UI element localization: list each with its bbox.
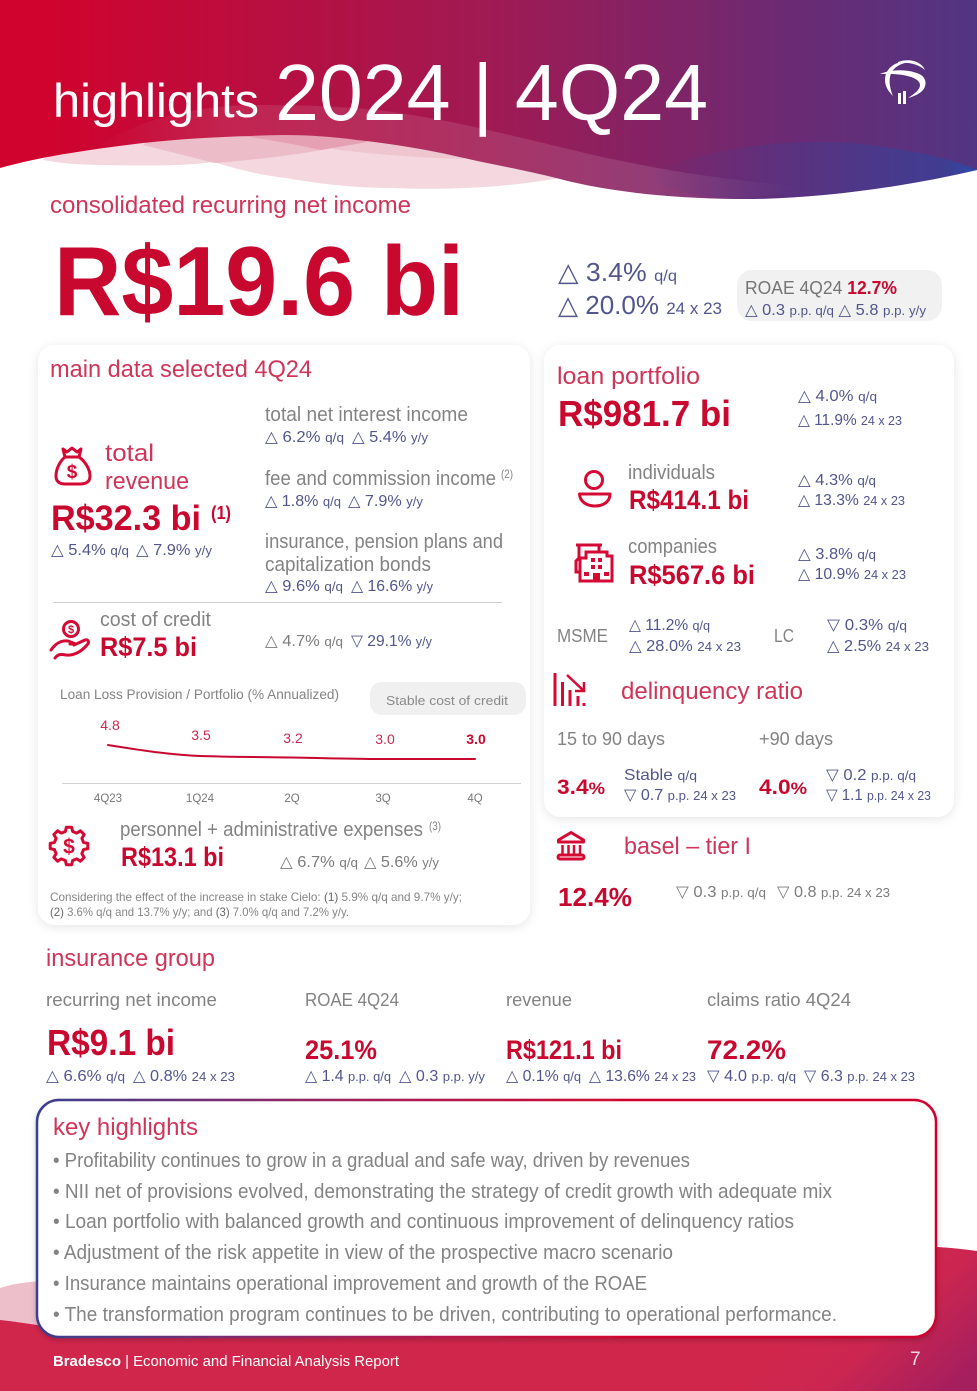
chart: loan loss provision: 1Q24 xyxy=(186,793,215,805)
callout: ROAE xyxy=(737,270,942,321)
recurring net income: △ 0.8% 24 x 23 xyxy=(133,1068,235,1085)
panel: key highlights xyxy=(37,1100,936,1337)
total revenue: R$32.3 bi xyxy=(51,499,201,538)
total revenue: △ 5.4% q/q xyxy=(51,542,129,559)
delinquency +90 days: ▽ 0.2 p.p. q/q xyxy=(826,767,916,784)
claims ratio 4Q24: claims ratio 4Q24 xyxy=(707,989,851,1010)
ROAE 4Q24: △ 0.3 p.p. y/y xyxy=(399,1068,485,1085)
bullet list: • NII net of provisions evolved, demonstrating the strategy of credit growth with adequate mix xyxy=(53,1181,832,1203)
callout: stable cost of credit: Stable cost of credit xyxy=(386,693,508,708)
bullet list: • The transformation program continues to be driven, contributing to operational performance. xyxy=(53,1304,837,1326)
section: consolidated recurring net income xyxy=(50,192,942,336)
panel: main data selected 4Q24 xyxy=(38,345,530,925)
bullet list: • Adjustment of the risk appetite in view of the prospective macro scenario xyxy=(53,1242,673,1264)
delinquency 15 to 90 days: 3.4% xyxy=(557,776,605,799)
chart: loan loss provision: 3.0 xyxy=(375,731,395,747)
revenue breakdown xyxy=(265,404,513,595)
section: insurance group xyxy=(46,945,915,1085)
delinquency +90 days xyxy=(759,729,931,804)
basel deltas: ▽ 0.3 p.p. q/q xyxy=(676,884,766,901)
delinquency +90 days: ▽ 1.1 p.p. 24 x 23 xyxy=(826,787,931,804)
personnel + administrative expenses: personnel + administrative expenses xyxy=(120,819,423,841)
personnel + administrative expenses: (3) xyxy=(429,819,441,833)
MSME xyxy=(557,617,741,655)
footnote: (2) 3.6% q/q and 13.7% y/y; and (3) 7.0% q/q and 7.2% y/y. xyxy=(50,905,349,919)
revenue breakdown: fee and commission income xyxy=(265,468,496,490)
cost of credit: R$7.5 bi xyxy=(100,632,197,662)
icon: bank xyxy=(558,832,584,859)
callout: stable cost of credit xyxy=(370,682,526,715)
basel deltas xyxy=(676,884,890,901)
delinquency 15 to 90 days: ▽ 0.7 p.p. 24 x 23 xyxy=(624,787,736,804)
basel value: 12.4% xyxy=(558,882,632,912)
big value: R$19.6 bi xyxy=(54,226,464,336)
icon: falling bars xyxy=(555,673,584,706)
chart: loan loss provision: 3.5 xyxy=(191,727,211,743)
icon: Bradesco logo xyxy=(880,60,926,104)
revenue breakdown: △ 1.8% q/q xyxy=(265,493,341,510)
personnel + administrative expenses: R$13.1 bi xyxy=(121,842,224,872)
LC xyxy=(774,617,929,655)
bullet list: • Profitability continues to grow in a gradual and safe way, driven by revenues xyxy=(53,1150,690,1172)
callout: ROAE: ROAE 4Q24 12.7% xyxy=(745,278,897,298)
ROAE 4Q24: ROAE 4Q24 xyxy=(305,989,399,1010)
loan portfolio deltas: △ 11.9% 24 x 23 xyxy=(798,412,902,429)
claims ratio 4Q24: ▽ 4.0 p.p. q/q xyxy=(707,1068,796,1085)
revenue breakdown: capitalization bonds xyxy=(265,554,431,576)
companies: △ 3.8% q/q xyxy=(798,546,876,563)
icon: hand with coin: $ xyxy=(68,624,74,636)
claims ratio 4Q24 xyxy=(707,989,915,1085)
LC: ▽ 0.3% q/q xyxy=(827,617,907,634)
revenue xyxy=(506,989,696,1085)
revenue: R$121.1 bi xyxy=(506,1035,622,1065)
total revenue: total xyxy=(105,440,154,467)
chart: loan loss provision xyxy=(60,682,526,805)
header wave background xyxy=(0,0,977,199)
icon: person xyxy=(580,472,610,506)
deltas: △ 3.4% q/q xyxy=(558,257,677,287)
icon: gear with dollar xyxy=(50,827,88,865)
individuals: R$414.1 bi xyxy=(629,485,749,515)
chart: loan loss provision: 4.8 xyxy=(100,717,120,733)
heading: basel: basel – tier I xyxy=(624,833,751,860)
ROAE 4Q24: 25.1% xyxy=(305,1035,377,1065)
icon: money bag xyxy=(56,448,90,484)
delinquency 15 to 90 days: 15 to 90 days xyxy=(557,729,665,749)
bullet list: • Loan portfolio with balanced growth and continuous improvement of delinquency ratios xyxy=(53,1211,794,1233)
footer wave background xyxy=(0,1246,977,1391)
footnote xyxy=(50,890,462,919)
MSME: △ 28.0% 24 x 23 xyxy=(629,638,741,655)
cost of credit: cost of credit xyxy=(100,609,211,631)
companies: R$567.6 bi xyxy=(629,560,755,590)
personnel + administrative expenses: △ 6.7% q/q xyxy=(280,854,358,871)
individuals: △ 4.3% q/q xyxy=(798,472,876,489)
chart: loan loss provision: 2Q xyxy=(284,793,300,805)
claims ratio 4Q24: ▽ 6.3 p.p. 24 x 23 xyxy=(804,1068,915,1085)
total revenue xyxy=(51,440,231,559)
heading: consolidated recurring net income: consolidated recurring net income xyxy=(50,192,411,219)
recurring net income: R$9.1 bi xyxy=(47,1022,175,1063)
heading: delinquency ratio: delinquency ratio xyxy=(621,678,803,705)
bullet list xyxy=(53,1150,837,1326)
chart: loan loss provision: Loan Loss Provision / Portfolio (% Annualized) xyxy=(60,687,339,702)
total revenue: (1) xyxy=(211,503,231,523)
delinquency 15 to 90 days xyxy=(557,729,736,804)
heading: key highlights: key highlights xyxy=(53,1114,198,1141)
LC: △ 2.5% 24 x 23 xyxy=(827,638,929,655)
individuals xyxy=(628,462,905,515)
chart: loan loss provision: 3.0 xyxy=(466,731,486,747)
ROAE 4Q24 xyxy=(305,989,485,1085)
loan portfolio deltas: △ 4.0% q/q xyxy=(798,388,877,405)
revenue breakdown: insurance, pension plans and xyxy=(265,531,503,553)
LC: LC xyxy=(774,626,794,646)
icon: hand with coin xyxy=(51,622,88,658)
bullet list: • Insurance maintains operational improvement and growth of the ROAE xyxy=(53,1273,647,1295)
revenue breakdown: △ 5.4% y/y xyxy=(352,429,428,446)
deltas: △ 20.0% 24 x 23 xyxy=(558,290,722,320)
revenue: △ 0.1% q/q xyxy=(506,1068,581,1085)
personnel + administrative expenses xyxy=(120,819,441,872)
delinquency +90 days: 4.0% xyxy=(759,776,807,799)
companies: △ 10.9% 24 x 23 xyxy=(798,566,906,583)
MSME: △ 11.2% q/q xyxy=(629,617,710,634)
revenue breakdown: △ 16.6% y/y xyxy=(351,578,433,595)
companies: companies xyxy=(628,536,717,558)
panel: loan portfolio and delinquency xyxy=(544,345,954,817)
revenue: revenue xyxy=(506,989,572,1010)
footnote: Considering the effect of the increase in stake Cielo: (1) 5.9% q/q and 9.7% y/y; xyxy=(50,890,462,904)
deltas xyxy=(558,257,722,320)
chart: loan loss provision: 3.2 xyxy=(283,730,303,746)
heading: insurance group: insurance group xyxy=(46,945,215,972)
revenue breakdown: (2) xyxy=(501,467,513,481)
revenue breakdown: △ 9.6% q/q xyxy=(265,578,343,595)
recurring net income: △ 6.6% q/q xyxy=(46,1068,125,1085)
revenue: △ 13.6% 24 x 23 xyxy=(589,1068,696,1085)
basel deltas: ▽ 0.8 p.p. 24 x 23 xyxy=(777,884,890,901)
section: basel tier I xyxy=(558,832,890,912)
revenue breakdown: total net interest income xyxy=(265,404,468,426)
MSME: MSME xyxy=(557,626,608,646)
title: 2024 | 4Q24 xyxy=(275,48,708,137)
delinquency 15 to 90 days: Stable q/q xyxy=(624,767,697,784)
page number: 7 xyxy=(910,1349,921,1370)
recurring net income: recurring net income xyxy=(46,989,217,1010)
icon: gear with dollar: $ xyxy=(63,836,75,858)
loan portfolio deltas xyxy=(798,388,902,429)
heading: main data: main data selected 4Q24 xyxy=(50,356,312,383)
title: highlights xyxy=(53,74,259,127)
delinquency +90 days: +90 days xyxy=(759,729,833,749)
cost of credit xyxy=(100,609,432,662)
callout: ROAE: △ 0.3 p.p. q/q △ 5.8 p.p. y/y xyxy=(745,302,926,319)
chart: loan loss provision: 3Q xyxy=(375,793,391,805)
personnel + administrative expenses: △ 5.6% y/y xyxy=(364,854,439,871)
recurring net income xyxy=(46,989,235,1085)
total revenue: △ 7.9% y/y xyxy=(136,542,212,559)
footer text: Bradesco | Economic and Financial Analysis Report xyxy=(53,1353,400,1370)
cost of credit: △ 4.7% q/q xyxy=(265,633,343,650)
companies xyxy=(628,536,906,590)
cost of credit: ▽ 29.1% y/y xyxy=(351,633,432,650)
individuals: individuals xyxy=(628,462,715,484)
ROAE 4Q24: △ 1.4 p.p. q/q xyxy=(305,1068,391,1085)
total revenue: revenue xyxy=(105,468,189,495)
icon: buildings xyxy=(576,545,612,581)
claims ratio 4Q24: 72.2% xyxy=(707,1035,786,1065)
heading: loan portfolio: loan portfolio xyxy=(557,363,700,390)
chart: loan loss provision: 4Q xyxy=(467,793,483,805)
revenue breakdown: △ 6.2% q/q xyxy=(265,429,344,446)
icon: money bag: $ xyxy=(67,462,78,483)
chart: loan loss provision: 4Q23 xyxy=(94,793,122,805)
title xyxy=(53,48,708,137)
loan portfolio value: R$981.7 bi xyxy=(558,393,731,434)
revenue breakdown: △ 7.9% y/y xyxy=(348,493,423,510)
individuals: △ 13.3% 24 x 23 xyxy=(798,492,905,509)
